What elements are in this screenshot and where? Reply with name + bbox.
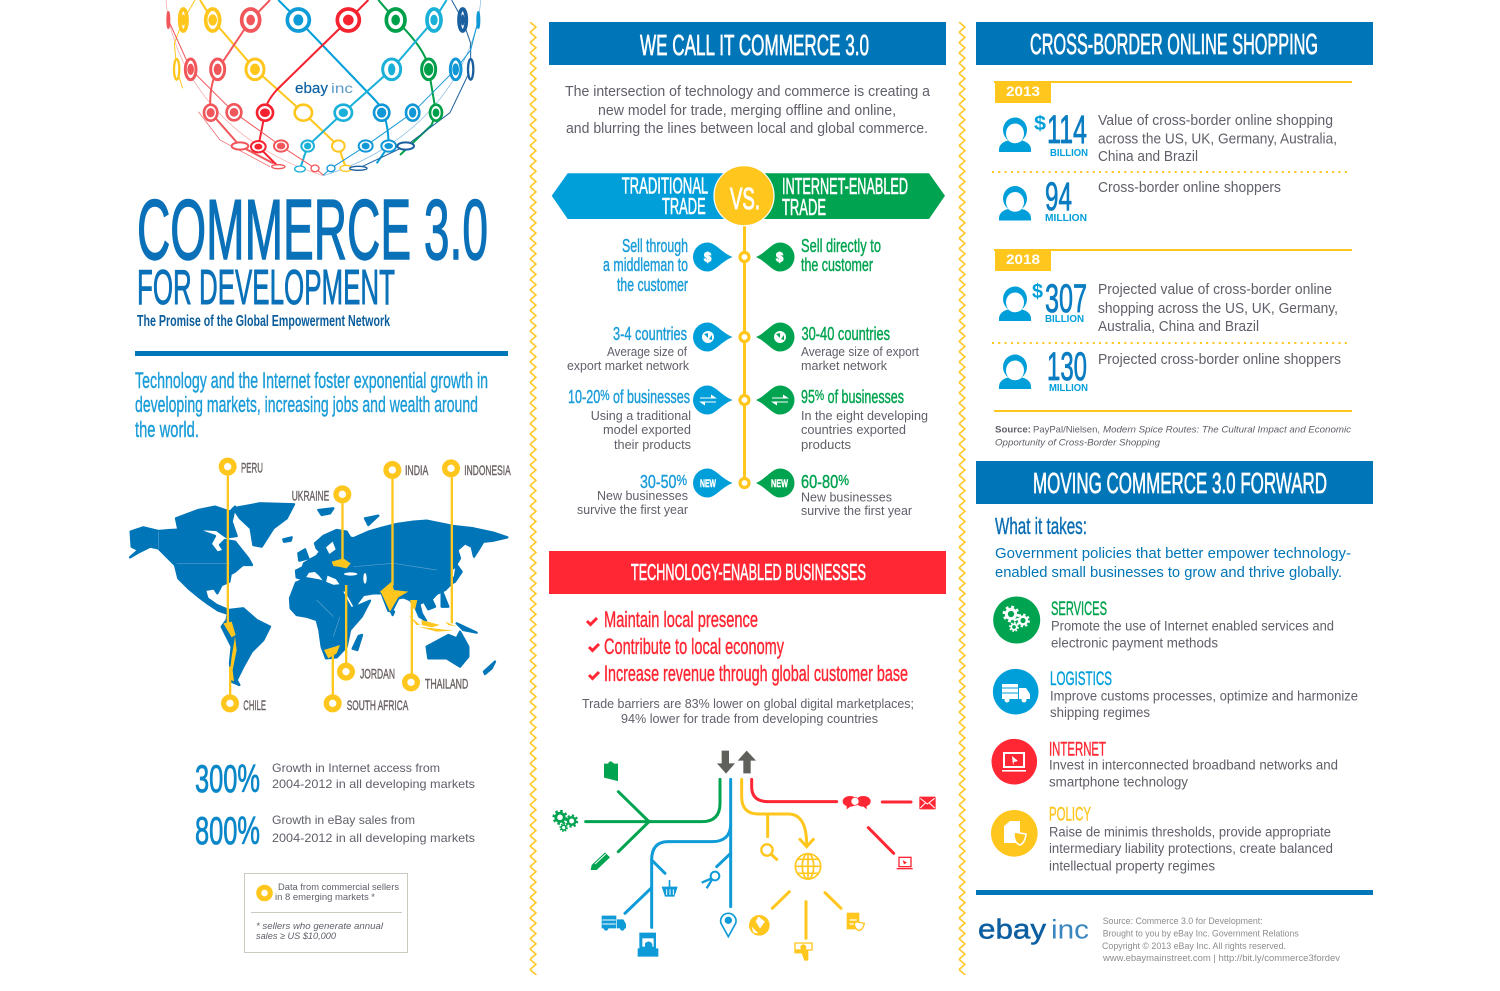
row: export market countries: 3-4 countries xyxy=(613,324,687,344)
2013 block: Cross-border online shoppers xyxy=(1098,180,1281,196)
row: share of businesses exporting: 95 xyxy=(801,387,821,407)
stat: 800% growth in eBay sales: 2004-2012 in all developing markets xyxy=(272,831,475,845)
intro paragraph: the world. xyxy=(135,417,199,442)
panel: technology-enabled businesses: Increase revenue through global customer base xyxy=(604,661,908,686)
legend box: Data from commercial sellers xyxy=(278,882,399,893)
comparison timeline spine xyxy=(740,220,749,488)
branch: yellow discovery xyxy=(742,779,864,961)
stat: 800% growth in eBay sales: 800% xyxy=(195,810,260,853)
panel: cross-border online shopping xyxy=(976,22,1373,449)
row: share of businesses exporting: of businesses xyxy=(824,387,904,407)
item: internet xyxy=(992,739,1338,790)
icon: down and up arrows xyxy=(717,751,756,774)
row: share of businesses exporting: % xyxy=(815,387,824,404)
panel: technology-enabled businesses: 94% lower for trade from developing countries xyxy=(621,711,878,726)
legend box: * sellers who generate annual xyxy=(256,921,384,932)
row: share of businesses exporting: of businesses xyxy=(610,387,690,407)
versus banner: INTERNET-ENABLED xyxy=(782,173,908,199)
panel: we call it commerce 3.0: new model for trade, merging offline and online, xyxy=(598,103,896,119)
panel: technology-enabled businesses: TECHNOLOGY-ENABLED BUSINESSES xyxy=(631,559,866,585)
row: sell through middleman vs directly: the customer xyxy=(801,255,873,275)
row: export market countries: Average size of xyxy=(607,344,687,359)
branch: blue logistics xyxy=(602,779,736,957)
source note: Opportunity of Cross-Border Shopping xyxy=(995,438,1161,449)
world map with eight emerging markets: SOUTH AFRICA xyxy=(347,697,409,713)
panel: we call it commerce 3.0: The intersection of technology and commerce is creating a xyxy=(565,84,931,100)
item: services: electronic payment methods xyxy=(1051,635,1218,650)
intro paragraph: developing markets, increasing jobs and wealth around xyxy=(135,392,478,417)
item: logistics: LOGISTICS xyxy=(1050,668,1112,690)
item: internet: smartphone technology xyxy=(1049,775,1188,790)
world map with eight emerging markets xyxy=(130,460,511,713)
row: sell through middleman vs directly: the customer xyxy=(617,275,688,295)
panel: we call it commerce 3.0: WE CALL IT COMMERCE 3.0 xyxy=(640,30,869,62)
2013 block: BILLION xyxy=(1050,148,1088,159)
source note: Modern Spice Routes: The Cultural Impact and Economic xyxy=(1103,425,1351,436)
row: sell through middleman vs directly: Sell through xyxy=(622,236,688,256)
panel: technology-enabled businesses xyxy=(549,551,946,726)
legend box: in 8 emerging markets * xyxy=(275,892,375,903)
legend box: sales ≥ US $10,000 xyxy=(256,931,337,942)
2018 block: MILLION xyxy=(1049,383,1088,394)
footer logo: ebay inc: inc xyxy=(1051,914,1089,944)
source note: PayPal/Nielsen, xyxy=(1033,425,1100,436)
item: policy: Raise de minimis thresholds, provide appropriate xyxy=(1049,825,1331,840)
title: The Promise of the Global Empowerment Network xyxy=(137,313,390,330)
item: logistics: Improve customs processes, optimize and harmonize xyxy=(1050,689,1358,704)
row: new business survival: NEW xyxy=(771,478,788,490)
world map with eight emerging markets: PERU xyxy=(241,460,263,476)
title: FOR DEVELOPMENT xyxy=(137,261,395,315)
2018 block: shopping across the US, UK, Germany, xyxy=(1098,301,1338,317)
row: export market countries xyxy=(567,322,919,373)
versus banner xyxy=(552,166,945,226)
panel: moving commerce 3.0 forward: enabled small businesses to grow and thrive globally. xyxy=(995,564,1342,581)
row: sell through middleman vs directly: $ xyxy=(704,250,712,264)
row: export market countries: export market network xyxy=(567,358,689,373)
world map with eight emerging markets: INDONESIA xyxy=(464,462,511,478)
row: share of businesses exporting: their products xyxy=(614,437,691,452)
row: new business survival: % xyxy=(838,472,849,489)
globe logo: ebay inc: inc xyxy=(331,80,353,96)
item: policy: POLICY xyxy=(1049,804,1091,826)
2013 block xyxy=(992,81,1352,224)
world map with eight emerging markets: THAILAND xyxy=(425,675,468,691)
row: share of businesses exporting xyxy=(568,386,928,452)
item: policy: intermediary liability protections, create balanced xyxy=(1049,841,1333,856)
footer source and copyright xyxy=(1102,916,1341,963)
row: new business survival: survive the first year xyxy=(801,503,913,518)
panel: moving commerce 3.0 forward: Government policies that better empower technology- xyxy=(995,545,1351,562)
footer source and copyright: Copyright © 2013 eBay Inc. All rights reserved. xyxy=(1102,941,1286,951)
row: share of businesses exporting: In the eight developing xyxy=(801,408,928,423)
stat: 800% growth in eBay sales xyxy=(195,810,475,853)
row: sell through middleman vs directly: $ xyxy=(776,250,784,264)
2013 block: 94 xyxy=(1045,175,1072,219)
footer source and copyright: Source: Commerce 3.0 for Development: xyxy=(1103,916,1263,926)
2013 block: across the US, UK, Germany, Australia, xyxy=(1098,132,1337,148)
row: share of businesses exporting: countries exported xyxy=(801,422,906,437)
row: new business survival xyxy=(577,468,913,518)
world map with eight emerging markets: CHILE xyxy=(243,697,266,713)
2013 block: 2013 xyxy=(1006,83,1040,99)
2018 block: BILLION xyxy=(1045,314,1084,325)
row: new business survival: 60-80 xyxy=(801,472,847,492)
row: new business survival: New businesses xyxy=(597,488,688,503)
row: share of businesses exporting: Using a traditional xyxy=(591,408,691,423)
row: new business survival: 30-50 xyxy=(640,472,686,492)
item: services: SERVICES xyxy=(1051,598,1107,620)
2013 block: Value of cross-border online shopping xyxy=(1098,113,1333,129)
item: internet: INTERNET xyxy=(1049,739,1106,761)
footer logo: ebay inc xyxy=(978,914,1089,944)
row: new business survival: New businesses xyxy=(801,490,892,504)
2018 block: $ xyxy=(1032,281,1043,303)
row: export market countries: 30-40 countries xyxy=(802,324,890,344)
versus banner: TRADITIONAL xyxy=(622,172,708,198)
decorative globe of connected icons xyxy=(166,0,481,176)
intro paragraph: Technology and the Internet foster exponential growth in xyxy=(135,368,488,393)
panel: technology-enabled businesses: Trade barriers are 83% lower on global digital marketplaces; xyxy=(582,696,914,711)
row: share of businesses exporting: % xyxy=(600,387,610,404)
footer logo: ebay inc: ebay xyxy=(978,914,1046,944)
world map with eight emerging markets: JORDAN xyxy=(360,665,395,681)
2018 block: Projected value of cross-border online xyxy=(1098,282,1332,298)
2018 block: 2018 xyxy=(1006,251,1040,267)
row: new business survival: % xyxy=(676,472,687,489)
row: sell through middleman vs directly xyxy=(603,236,881,295)
row: new business survival: NEW xyxy=(700,478,716,490)
2018 block: Australia, China and Brazil xyxy=(1098,319,1259,335)
item: policy xyxy=(991,804,1333,874)
2018 block: Projected cross-border online shoppers xyxy=(1098,352,1341,368)
stat: 300% growth in Internet access: Growth in Internet access from xyxy=(272,761,440,775)
item: services: Promote the use of Internet enabled services and xyxy=(1051,619,1334,634)
2013 block: MILLION xyxy=(1045,213,1087,224)
versus banner: TRADE xyxy=(782,194,826,220)
panel: we call it commerce 3.0: and blurring the lines between local and global commerce. xyxy=(566,121,928,137)
stat: 300% growth in Internet access xyxy=(195,758,475,801)
row: share of businesses exporting: products xyxy=(801,437,851,452)
2018 block: 307 xyxy=(1045,277,1087,321)
branch: green tools xyxy=(554,762,720,870)
title: COMMERCE 3.0 xyxy=(137,183,488,278)
panel: moving commerce 3.0 forward xyxy=(976,461,1373,874)
item: internet: Invest in interconnected broadband networks and xyxy=(1049,757,1338,772)
item: logistics: shipping regimes xyxy=(1050,705,1150,720)
row: share of businesses exporting: 10-20 xyxy=(568,387,614,407)
globe logo: ebay inc: ebay xyxy=(295,80,329,97)
footer source and copyright: www.ebaymainstreet.com | http://bit.ly/commerce3fordev xyxy=(1102,953,1341,963)
row: sell through middleman vs directly: Sell directly to xyxy=(801,236,881,256)
2013 block: China and Brazil xyxy=(1098,149,1198,165)
source note xyxy=(995,425,1351,449)
world map with eight emerging markets: UKRAINE xyxy=(292,488,329,504)
2018 block xyxy=(992,249,1352,394)
panel: we call it commerce 3.0 xyxy=(549,22,946,137)
title xyxy=(137,183,488,330)
stat: 300% growth in Internet access: 2004-2012 in all developing markets xyxy=(272,777,475,791)
globe logo: ebay inc xyxy=(295,80,353,97)
2013 block: $ xyxy=(1034,113,1046,135)
item: policy: intellectual property regimes xyxy=(1049,859,1215,874)
panel: moving commerce 3.0 forward: What it takes: xyxy=(995,513,1087,539)
2013 block: 114 xyxy=(1047,108,1087,152)
row: sell through middleman vs directly: a middleman to xyxy=(603,255,688,275)
row: share of businesses exporting: model exported xyxy=(603,422,691,437)
versus banner: VS. xyxy=(730,181,760,216)
row: new business survival: survive the first year xyxy=(577,502,689,517)
panel: technology-enabled businesses: Contribute to local economy xyxy=(604,634,784,659)
item: services xyxy=(993,596,1334,650)
world map with eight emerging markets: INDIA xyxy=(405,462,429,478)
network diagram of commerce icons xyxy=(554,751,936,961)
panel: technology-enabled businesses: Maintain local presence xyxy=(604,607,758,632)
2018 block: 130 xyxy=(1047,345,1087,389)
legend box xyxy=(244,874,408,952)
source note: Source: xyxy=(995,425,1031,436)
stat: 800% growth in eBay sales: Growth in eBay sales from xyxy=(272,813,415,827)
row: export market countries: market network xyxy=(801,358,887,373)
row: export market countries: Average size of export xyxy=(801,344,919,359)
item: logistics xyxy=(993,668,1358,720)
intro paragraph xyxy=(135,368,488,442)
versus banner: TRADE xyxy=(662,193,706,219)
branch: red communication xyxy=(752,779,936,869)
stat: 300% growth in Internet access: 300% xyxy=(195,758,260,801)
footer source and copyright: Brought to you by eBay Inc. Government Relations xyxy=(1103,929,1299,939)
